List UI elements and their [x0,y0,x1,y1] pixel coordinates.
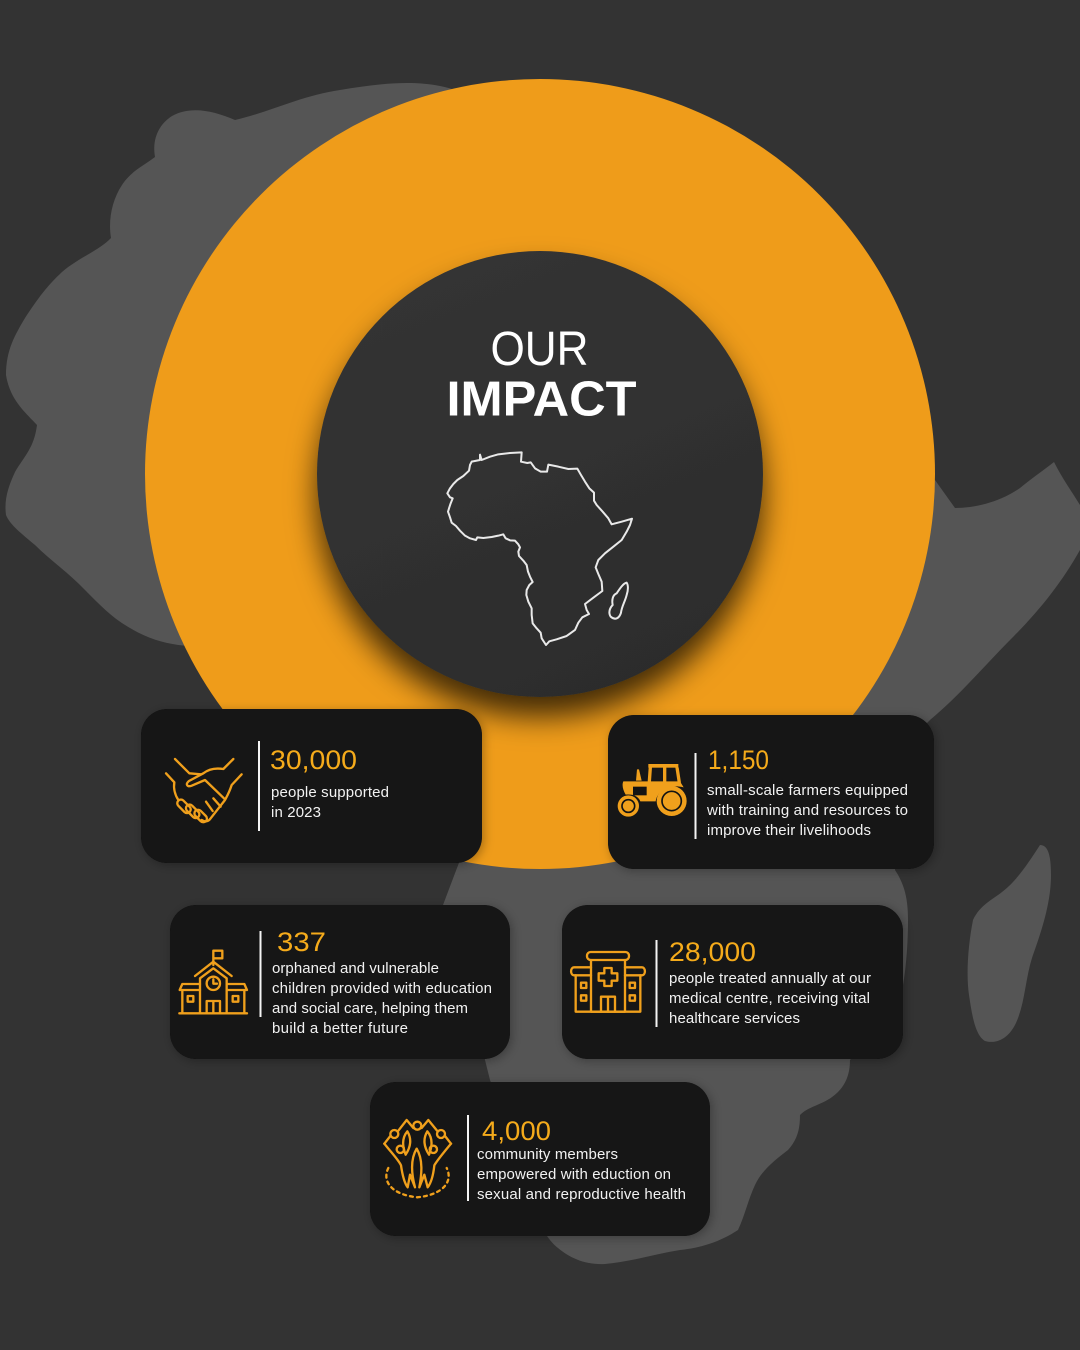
description [706,782,908,839]
central dark disc [317,251,763,697]
description: improve their livelihoods [707,822,871,839]
description [271,784,389,821]
card: 1,150 farmers [608,715,934,869]
description: people treated annually at our [669,970,871,987]
description: in 2023 [271,804,321,821]
stat number: 337 [277,927,326,957]
description: people supported [271,784,389,801]
title: OUR [490,323,588,376]
title: IMPACT [446,372,637,426]
description: small-scale farmers equipped [707,782,908,799]
divider [656,940,658,1027]
card: 337 children [170,905,510,1059]
description: orphaned and vulnerable [272,960,439,977]
description: community members [477,1146,618,1163]
divider [467,1115,469,1201]
icon: tractor [618,764,687,817]
description: and social care, helping them [272,1000,468,1017]
description: medical centre, receiving vital [669,990,870,1007]
card: 4,000 community members [370,1082,710,1236]
stat number: 30,000 [270,745,357,775]
description: children provided with education [272,980,492,997]
icon: community group [384,1120,451,1197]
divider [694,753,696,839]
description: sexual and reproductive health [477,1186,686,1203]
stat number: 4,000 [482,1116,551,1146]
orange ring [145,79,935,869]
card: 28,000 people treated [562,905,903,1059]
divider [260,931,262,1017]
description: empowered with eduction on [477,1166,671,1183]
stat number: 28,000 [669,937,756,967]
icon: handshake [166,759,242,824]
card: 30,000 people supported [141,709,482,863]
divider [258,741,260,831]
title [446,323,637,426]
icon: school [179,951,247,1013]
description: build a better future [272,1020,408,1037]
description: with training and resources to [706,802,908,819]
description [272,960,492,1037]
description [669,970,871,1027]
icon: hospital [571,952,645,1012]
description [477,1146,686,1203]
description: healthcare services [669,1010,800,1027]
icon: Africa outline map [447,452,632,645]
stat number: 1,150 [708,745,769,775]
